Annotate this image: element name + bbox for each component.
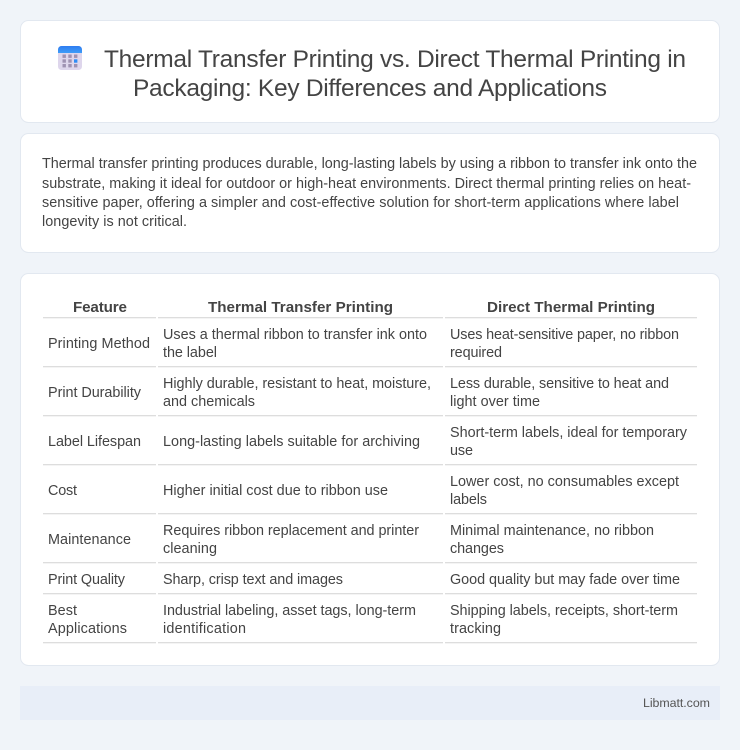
row: best applications: Applications	[48, 621, 127, 637]
row: printing method: Uses a thermal ribbon to transfer ink onto	[163, 327, 427, 343]
panel: introduction	[20, 134, 720, 252]
row: print durability: Highly durable, resistant to heat, moisture,	[163, 376, 431, 392]
row: best applications: Shipping labels, receipts, short-term	[450, 603, 678, 619]
row: label lifespan: Long-lasting labels suitable for archiving	[163, 434, 420, 450]
row: maintenance: Requires ribbon replacement and printer	[163, 523, 419, 539]
row: maintenance: cleaning	[163, 541, 217, 557]
footer: Libmatt.com	[643, 696, 710, 710]
table header: Thermal Transfer Printing	[208, 299, 393, 316]
row: printing method: required	[450, 345, 502, 361]
row: label lifespan: Label Lifespan	[48, 434, 141, 450]
row: maintenance: changes	[450, 541, 504, 557]
text block: intro paragraph: substrate, making it ideal for outdoor or high-heat environments. Direct thermal printing relies on heat-	[42, 176, 691, 192]
row: print durability: light over time	[450, 394, 540, 410]
panel: header	[20, 20, 720, 122]
text block: intro paragraph: longevity is not critical.	[42, 214, 187, 230]
row: print durability: Print Durability	[48, 385, 142, 401]
row: maintenance	[48, 523, 654, 557]
row: best applications	[48, 603, 678, 637]
row: maintenance: Minimal maintenance, no ribbon	[450, 523, 654, 539]
row: print durability	[48, 376, 669, 410]
row: label lifespan: use	[450, 443, 473, 459]
row: print quality: Print Quality	[48, 572, 126, 588]
row: best applications: Best	[48, 603, 77, 619]
table header	[73, 299, 655, 316]
row: print quality: Sharp, crisp text and images	[163, 572, 343, 588]
text block: intro paragraph: sensitive paper, offering a simpler and cost-effective solution for short-term applications where label	[42, 195, 679, 211]
icon: calendar grid	[58, 46, 82, 70]
row: cost: Higher initial cost due to ribbon use	[163, 483, 388, 499]
row: printing method: the label	[163, 345, 217, 361]
row: printing method: Uses heat-sensitive paper, no ribbon	[450, 327, 679, 343]
row: label lifespan: Short-term labels, ideal for temporary	[450, 425, 688, 441]
title: Thermal Transfer Printing vs. Direct Thermal Printing in	[104, 46, 686, 73]
row: maintenance: Maintenance	[48, 532, 131, 548]
panel: comparison table	[20, 274, 720, 666]
row: printing method: Printing Method	[48, 336, 150, 352]
footer	[20, 686, 720, 720]
row: cost	[48, 474, 679, 508]
row: cost: Lower cost, no consumables except	[450, 474, 679, 490]
text block: intro paragraph	[42, 156, 697, 230]
table header: Direct Thermal Printing	[487, 299, 655, 316]
row: print durability: and chemicals	[163, 394, 255, 410]
row: best applications: Industrial labeling, asset tags, long-term	[163, 603, 416, 619]
table header: Feature	[73, 299, 127, 316]
row: print quality: Good quality but may fade over time	[450, 572, 680, 588]
row: printing method	[48, 327, 679, 361]
row: cost: labels	[450, 492, 487, 508]
title	[104, 46, 686, 102]
text block: intro paragraph: Thermal transfer printing produces durable, long-lasting labels by using a ribbon to transfer ink onto the	[42, 156, 697, 172]
row: print quality	[48, 572, 680, 588]
row: best applications: tracking	[450, 621, 501, 637]
row: cost: Cost	[48, 483, 77, 499]
title: Packaging: Key Differences and Applications	[133, 75, 607, 102]
row: best applications: identification	[163, 621, 246, 637]
row: print durability: Less durable, sensitive to heat and	[450, 376, 669, 392]
row: label lifespan	[48, 425, 688, 459]
